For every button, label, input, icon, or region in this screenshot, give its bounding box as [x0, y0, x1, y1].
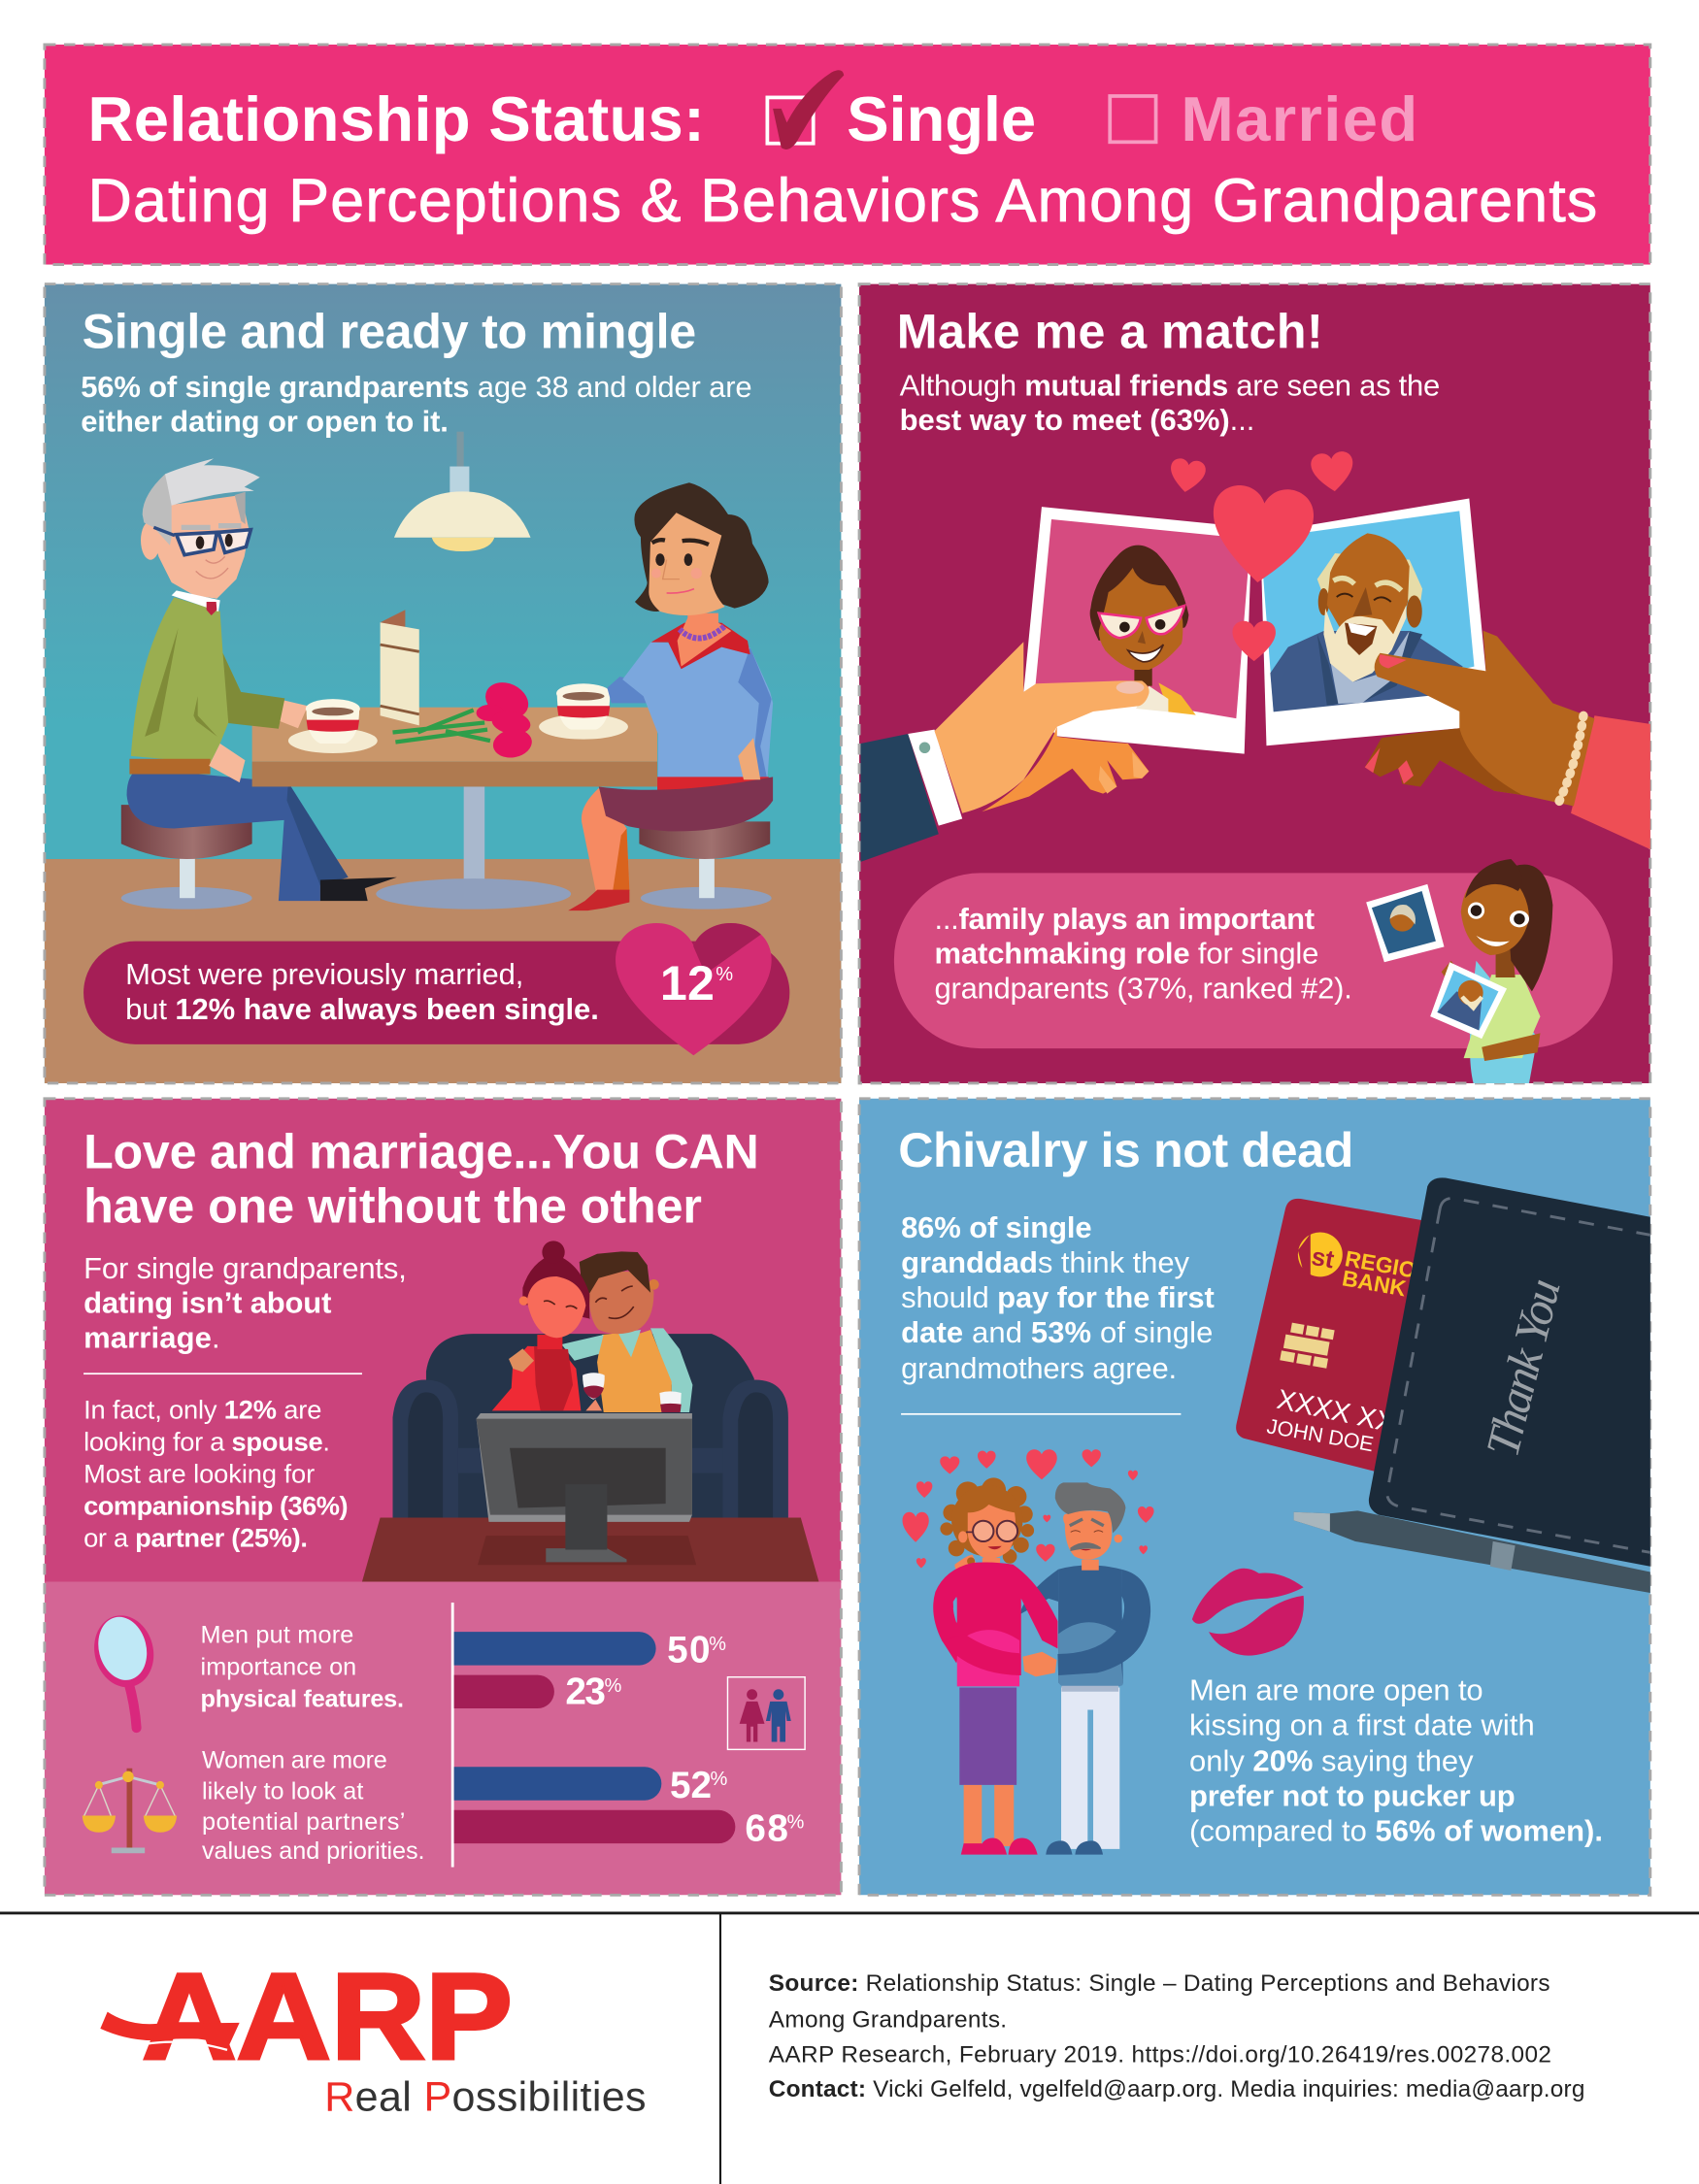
source text: [769, 1970, 1584, 2102]
callout text: [125, 957, 599, 1026]
bar: values men 52%: 52: [670, 1765, 712, 1806]
text: values and priorities: Women are more: [202, 1747, 387, 1774]
illustration: menu: [381, 610, 419, 725]
text: kissing on a first date: (compared to 56% of women).: [1189, 1813, 1603, 1847]
panel: chivalry is not dead: [859, 1099, 1650, 1895]
bar: physical features men 50%: 50: [667, 1630, 711, 1671]
heading: Single and ready to mingle: [83, 305, 696, 359]
illustration: coffee cup right: [539, 683, 628, 740]
legend: women and men: [727, 1677, 805, 1749]
text: looking for: Most are looking for: [83, 1459, 315, 1489]
text: looking for: looking for a spouse.: [83, 1427, 330, 1457]
text: who pays: [901, 1210, 1215, 1385]
bar: values women 68%: 68: [745, 1807, 788, 1849]
illustration: coffee cup left: [288, 699, 378, 753]
bar: physical features women 23%: %: [605, 1675, 622, 1697]
illustration: pen: [1294, 1510, 1650, 1593]
text: looking for: or a partner (25%).: [83, 1523, 308, 1553]
source text: Source: Relationship Status: Single – Dating Perceptions and Behaviors: [769, 1970, 1550, 1997]
illustration: tulips: [393, 676, 534, 761]
illustration: right hand with bracelet: [1365, 631, 1650, 849]
option: married: Married: [1181, 83, 1417, 154]
callout: family matchmaking: [894, 873, 1613, 1048]
callout text: grandparents (37%, ranked #2).: [935, 971, 1352, 1005]
heading: Chivalry is not dead: [898, 1123, 1353, 1177]
icon: checked box: [767, 70, 844, 149]
text: who pays: grandmothers agree.: [901, 1351, 1177, 1385]
text: physical features: [201, 1622, 404, 1713]
text: looking for: companionship (36%): [83, 1491, 349, 1521]
icon: empty box: [1110, 96, 1156, 142]
illustration: right photo: [1260, 499, 1486, 745]
title: relationship status: Relationship Status:: [87, 83, 705, 154]
text: values and priorities: potential partners’: [202, 1808, 405, 1836]
illustration: scales: [83, 1769, 177, 1853]
illustration: older couple: [933, 1477, 1150, 1855]
text: values and priorities: likely to look at: [202, 1777, 363, 1804]
panel: header banner: [45, 45, 1650, 265]
illustration: grandfather arm: [223, 653, 308, 729]
panel: single and ready to mingle: [45, 284, 841, 1083]
illustration: left stool: [121, 805, 252, 910]
text: kissing on a first date: Men are more open to: [1189, 1672, 1483, 1706]
source text: Among Grandparents.: [769, 2007, 1007, 2034]
bar chart: men and women: [454, 1630, 804, 1849]
stat: 12 percent: %: [716, 964, 733, 985]
icon: heart: [616, 912, 772, 1055]
callout text: [935, 902, 1352, 1005]
logo: AARP: AARP: [142, 1948, 513, 2085]
text: physical features: importance on: [201, 1654, 356, 1681]
illustration: hearts: [1168, 450, 1355, 661]
intro text: 56% of single grandparents age 38 and older are: [81, 370, 752, 404]
text: kissing on a first date: [1189, 1672, 1603, 1847]
illustration: credit card: BANK: [1340, 1265, 1409, 1301]
intro text: Although mutual friends are seen as the: [900, 368, 1440, 402]
illustration: credit card: REGIO: [1343, 1245, 1418, 1283]
text: who pays: 86% of single: [901, 1210, 1092, 1244]
text: looking for: In fact, only 12% are: [83, 1395, 321, 1425]
illustration: couple on sofa: [393, 1241, 788, 1518]
illustration: lips: [1192, 1569, 1304, 1656]
logo tagline: Real Possibilities: [324, 2074, 647, 2121]
illustration: table top: [252, 708, 657, 786]
text: dating isn't about marriage: marriage.: [83, 1321, 220, 1355]
callout text: matchmaking role for single: [935, 937, 1318, 971]
heading: Love and marriage...You CAN: [83, 1124, 759, 1178]
bar: values men 52%: [454, 1765, 728, 1806]
illustration: table and monitor: [362, 1413, 818, 1582]
heading: have one without the other: [83, 1178, 702, 1233]
illustration: wallet: [1369, 1177, 1650, 1567]
illustration: credit card: [1236, 1199, 1434, 1475]
illustration: granddaughter with photos: [1366, 859, 1552, 1083]
stat: 12 percent: 12: [660, 956, 715, 1010]
bar: values women 68%: %: [786, 1811, 804, 1833]
bar: physical features men 50%: [454, 1630, 726, 1671]
callout text: Most were previously married,: [125, 957, 523, 991]
illustration: credit card: st: [1310, 1243, 1337, 1274]
text: dating isn't about marriage: dating isn’t about: [83, 1286, 331, 1320]
illustration: credit card: JOHN DOE: [1265, 1414, 1376, 1456]
text: values and priorities: values and priorities.: [202, 1837, 425, 1865]
bar: physical features men 50%: %: [709, 1634, 726, 1655]
bar: values men 52%: %: [711, 1769, 728, 1790]
illustration: mirror: [86, 1609, 161, 1728]
text: values and priorities: [202, 1747, 425, 1865]
text: physical features: physical features.: [201, 1686, 404, 1713]
logo: AARP: [100, 1948, 647, 2121]
panel: make me a match: [859, 284, 1650, 1083]
callout text: but 12% have always been single.: [125, 992, 599, 1026]
illustration: left photo: [1023, 507, 1252, 754]
bar: physical features women 23%: 23: [565, 1671, 606, 1713]
text: physical features: Men put more: [201, 1622, 353, 1649]
intro text: [81, 370, 752, 439]
source text: Contact: Vicki Gelfeld, vgelfeld@aarp.org. Media inquiries: media@aarp.org: [769, 2076, 1584, 2102]
bar: physical features women 23%: [454, 1671, 622, 1713]
intro text: either dating or open to it.: [81, 405, 449, 439]
subtitle: Dating Perceptions & Behaviors Among Grandparents: [87, 167, 1597, 235]
illustration: right stool: [639, 821, 772, 910]
heading: Make me a match!: [897, 305, 1323, 359]
text: kissing on a first date: prefer not to pucker up: [1189, 1778, 1516, 1812]
illustration: pendant lamp: [394, 432, 531, 551]
text: dating isn't about marriage: [83, 1251, 407, 1355]
bar: values women 68%: [454, 1807, 804, 1849]
illustration: grandfather: [127, 458, 397, 901]
illustration: credit card: XXXX XX: [1274, 1384, 1397, 1439]
text: dating isn't about marriage: For single grandparents,: [83, 1251, 407, 1285]
illustration: table base: [376, 786, 571, 910]
panel: love and marriage: [45, 1099, 841, 1895]
illustration: hearts around couple: [903, 1449, 1154, 1568]
source text: AARP Research, February 2019. https://doi.org/10.26419/res.00278.002: [769, 2041, 1551, 2068]
intro text: [900, 368, 1440, 437]
text: kissing on a first date: only 20% saying they: [1189, 1744, 1474, 1778]
intro text: best way to meet (63%)...: [900, 403, 1254, 437]
text: who pays: granddads think they: [901, 1245, 1190, 1279]
text: who pays: date and 53% of single: [901, 1315, 1213, 1349]
heading: [83, 1124, 759, 1233]
footer: [0, 1911, 1699, 2184]
text: who pays: should pay for the first: [901, 1280, 1215, 1314]
callout: always been single: [83, 912, 789, 1055]
option: single: Single: [847, 83, 1036, 154]
illustration: left hand: [860, 642, 1149, 862]
text: looking for: [83, 1395, 349, 1553]
callout text: ...family plays an important: [935, 902, 1315, 936]
wallet text: Thank You: [1476, 1274, 1571, 1462]
text: kissing on a first date: kissing on a first date with: [1189, 1707, 1535, 1741]
illustration: grandmother: [568, 482, 773, 910]
